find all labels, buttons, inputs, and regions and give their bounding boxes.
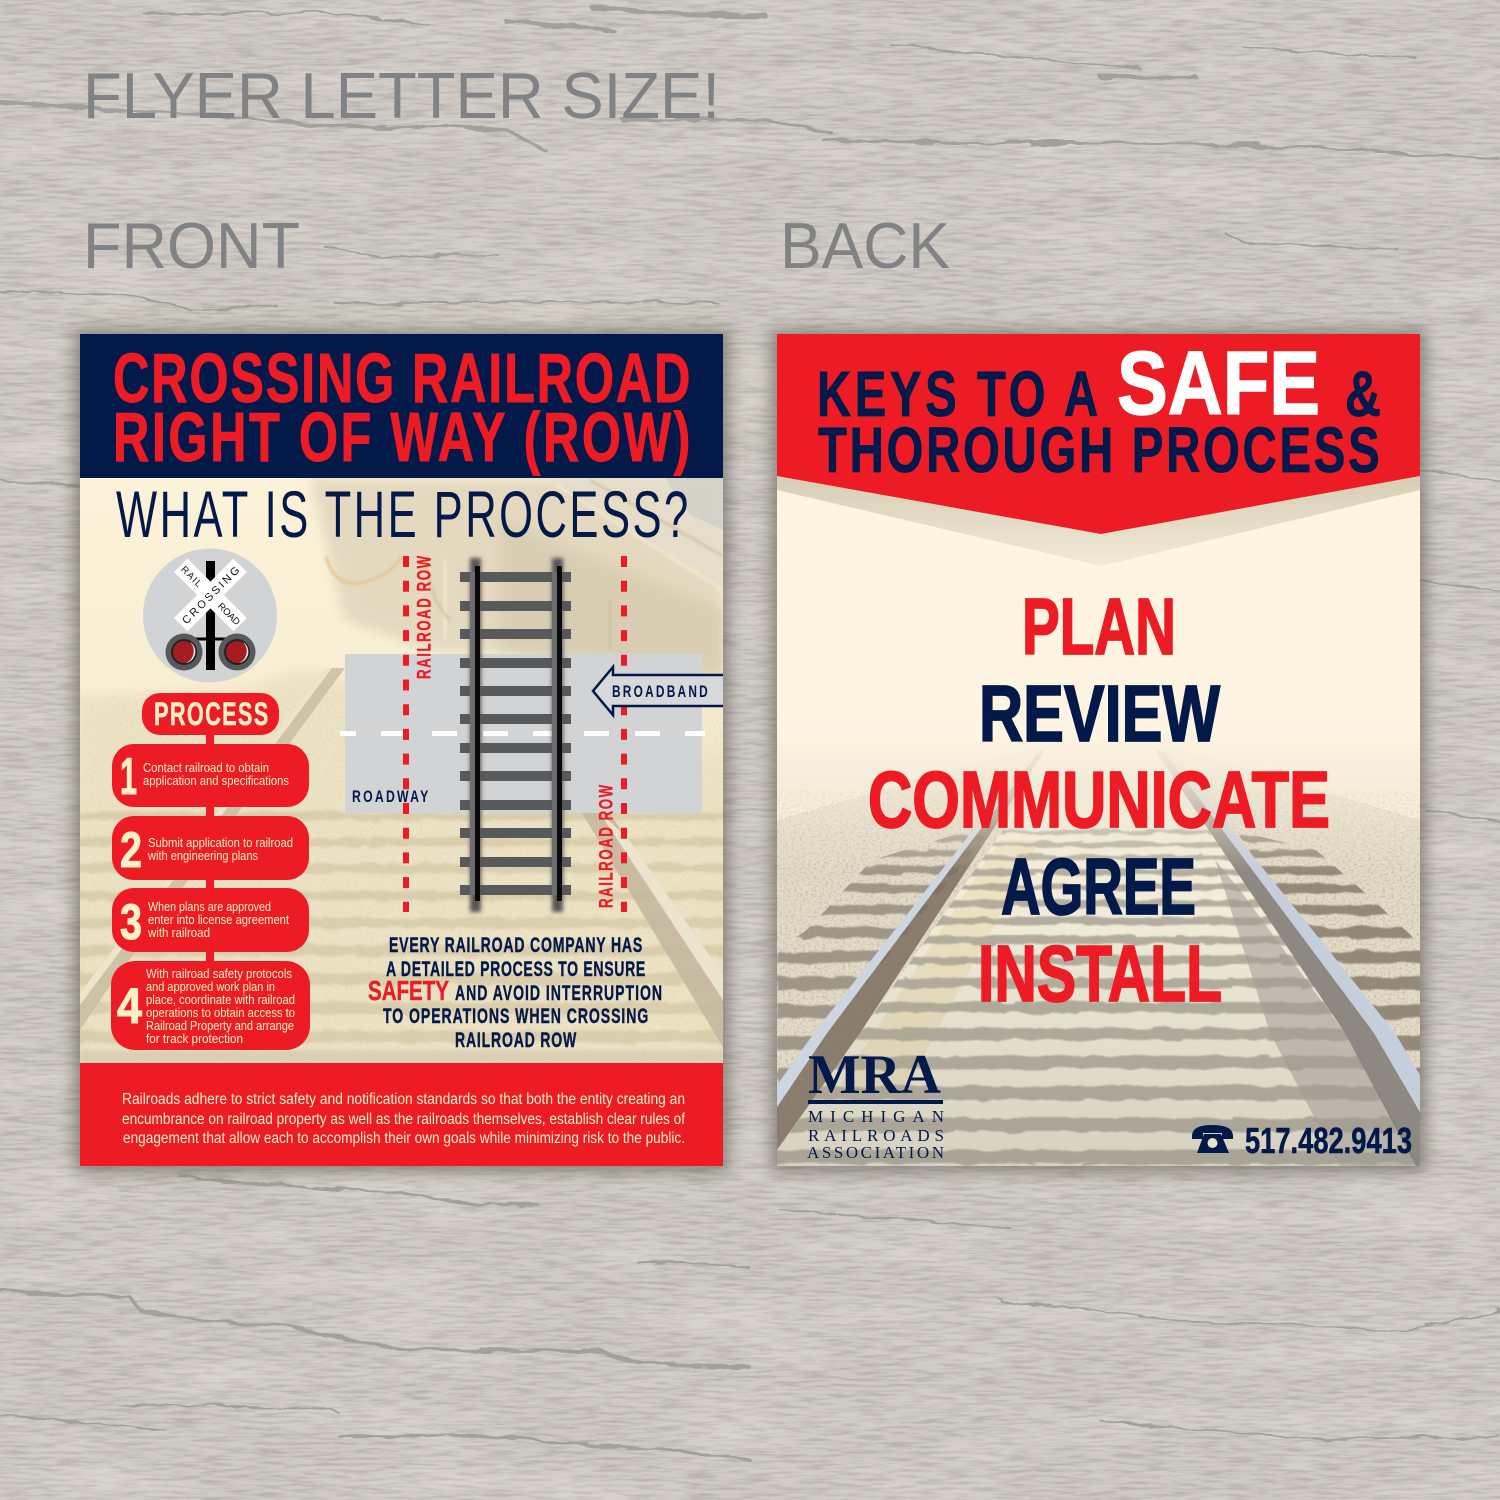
step 2: Submit application to railroad	[148, 836, 293, 850]
label: front: FRONT	[83, 209, 300, 282]
subtitle: WHAT IS THE PROCESS?	[116, 477, 688, 551]
process flow	[111, 693, 310, 1050]
headline	[817, 334, 1381, 486]
keywords list: COMMUNICATE	[868, 755, 1330, 844]
red header chevron	[777, 334, 1420, 534]
right inner shading	[1215, 860, 1420, 1166]
step 4: Railroad Property and arrange	[146, 1019, 294, 1033]
step 3	[112, 888, 309, 952]
step 1: 1	[120, 748, 137, 806]
title: CROSSING RAILROAD	[113, 339, 690, 417]
step 2: with engineering plans	[147, 849, 258, 863]
fog	[777, 745, 1420, 864]
roadway	[340, 654, 705, 813]
header band	[80, 334, 723, 478]
process heading: PROCESS	[154, 696, 268, 732]
step 4: operations to obtain access to	[146, 1006, 295, 1020]
step 1: Contact railroad to obtain	[143, 761, 269, 775]
headline: THOROUGH PROCESS	[818, 414, 1380, 486]
safety statement: A DETAILED PROCESS TO ENSURE	[386, 957, 645, 981]
logo: Michigan Railroads Association: MRA	[808, 1044, 942, 1106]
step 3: with railroad	[147, 926, 210, 940]
railroad ROW boundary lines	[406, 556, 624, 912]
step 2: 2	[120, 822, 142, 878]
rails	[80, 668, 345, 1030]
panel: back flyer	[766, 330, 1430, 1172]
outer ties	[777, 834, 975, 1083]
step 4: 4	[117, 978, 142, 1034]
back flyer background photo	[777, 476, 1420, 1166]
rails	[777, 750, 1045, 1150]
safety statement: SAFETY	[368, 975, 449, 1006]
logo: Michigan Railroads Association: RAILROADS	[808, 1126, 944, 1145]
safety statement: RAILROAD ROW	[455, 1028, 576, 1052]
logo: Michigan Railroads Association	[807, 1044, 944, 1162]
railroad track	[460, 558, 571, 912]
title: RIGHT OF WAY (ROW)	[113, 398, 690, 476]
central ballast and ties	[777, 790, 1416, 1166]
logo: Michigan Railroads Association: MICHIGAN	[808, 1107, 944, 1126]
step 4: and approved work plan in	[146, 980, 275, 994]
keywords list: REVIEW	[979, 669, 1220, 758]
icon: railroad crossing sign: CROSSING	[180, 565, 242, 627]
icon: railroad crossing sign: ROAD	[215, 601, 242, 628]
arrow: broadband: BROADBAND	[612, 683, 708, 702]
step 4: place, coordinate with railroad	[146, 993, 295, 1007]
footer band: encumbrance on railroad property as well as the railroads themselves, establish clear rules of	[122, 1111, 686, 1128]
keywords list: PLAN	[1022, 582, 1176, 671]
heading: flyer letter size: FLYER LETTER SIZE!	[83, 59, 720, 132]
icon: railroad crossing sign: RAIL	[178, 564, 204, 590]
ballast	[80, 670, 723, 1063]
keywords list: AGREE	[1001, 842, 1196, 931]
icon: telephone	[1192, 1125, 1233, 1153]
step 3: When plans are approved	[148, 900, 271, 914]
footer band: engagement that allow each to accomplish their own goals while minimizing risk to the public.	[123, 1130, 685, 1147]
headline: &	[1345, 358, 1381, 430]
footer band: Railroads adhere to strict safety and notification standards so that both the entity creating an	[122, 1091, 685, 1108]
step 2	[112, 816, 309, 880]
label: back: BACK	[780, 209, 950, 282]
keywords list	[868, 582, 1330, 1018]
footer band	[80, 1063, 723, 1166]
safety statement: EVERY RAILROAD COMPANY HAS	[389, 933, 642, 957]
keywords list: INSTALL	[978, 929, 1222, 1018]
step 1	[112, 744, 309, 807]
icon: railroad crossing sign	[143, 548, 277, 682]
locomotive ghost	[310, 478, 723, 670]
step 4: for track protection	[146, 1032, 243, 1046]
step 3: 3	[120, 894, 142, 950]
railroad ROW label right: RAILROAD ROW	[596, 784, 617, 908]
title	[113, 339, 690, 476]
headline: SAFE	[1117, 334, 1320, 434]
step 4	[111, 961, 310, 1050]
front flyer background photo	[60, 478, 740, 1063]
panel: front flyer	[60, 330, 740, 1172]
safety statement: TO OPERATIONS WHEN CROSSING	[383, 1004, 648, 1028]
railroad ROW label left: RAILROAD ROW	[414, 555, 435, 679]
safety statement	[368, 933, 662, 1052]
crossing diagram	[340, 555, 723, 912]
roadway: ROADWAY	[352, 788, 428, 807]
safety statement: AND AVOID INTERRUPTION	[455, 981, 662, 1005]
headline: KEYS TO A	[817, 358, 1098, 430]
logo: Michigan Railroads Association: ASSOCIATION	[807, 1143, 944, 1162]
step 1: application and specifications	[143, 774, 289, 788]
step 4: With railroad safety protocols	[146, 967, 292, 981]
step 3: enter into license agreement	[148, 913, 289, 927]
arrow: broadband	[593, 667, 723, 715]
chevron shadow	[777, 476, 1420, 566]
phone number: 517.482.9413	[1245, 1120, 1412, 1161]
